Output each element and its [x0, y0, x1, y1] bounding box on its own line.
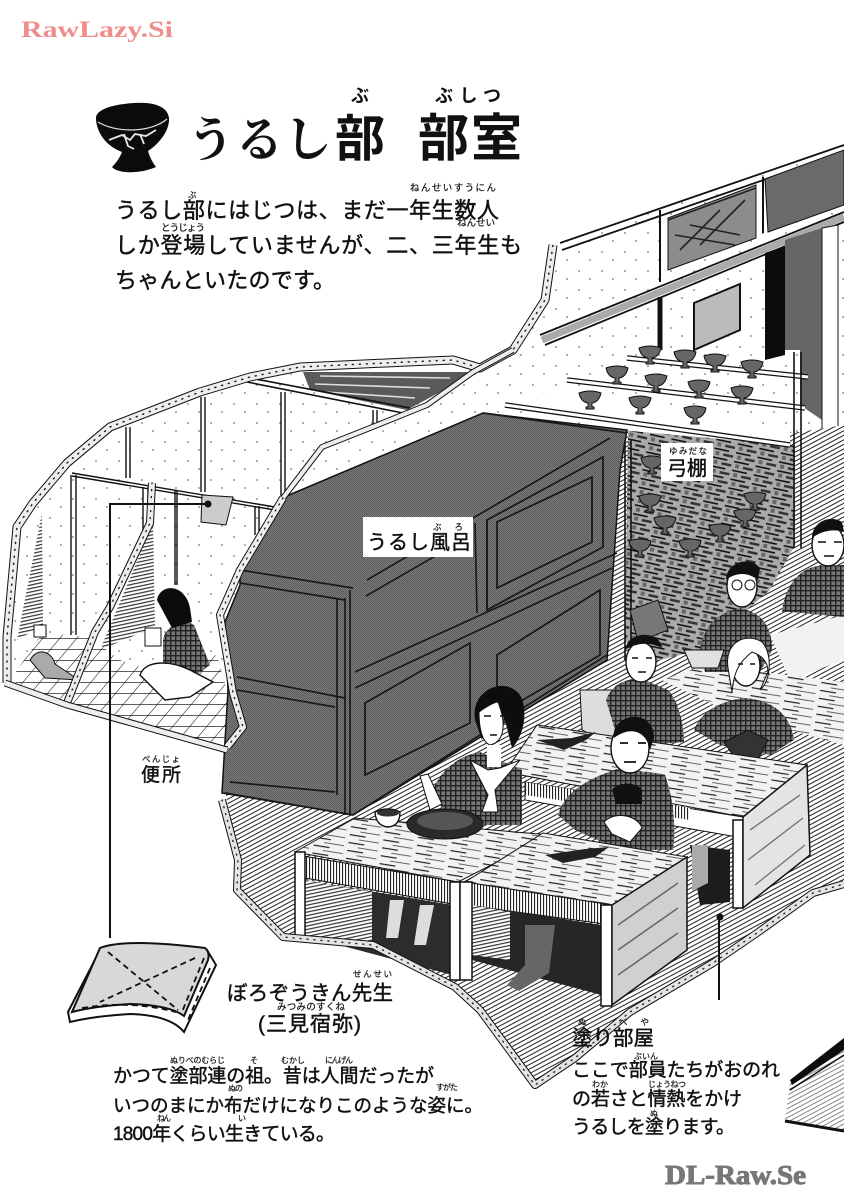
- leader line: toilet towel to rag: [110, 500, 212, 938]
- description: boro-zoukin sensei: ぬりべのむらじ: [170, 1056, 225, 1065]
- front girl student: [420, 686, 524, 825]
- intro text block: ねんせい: [457, 218, 495, 229]
- table B: [460, 833, 687, 1006]
- title: ぶしつ: [435, 86, 501, 106]
- description: boro-zoukin sensei: にんげん: [325, 1056, 353, 1065]
- label: yumidana: [661, 443, 713, 481]
- label: toilet: 便所: [141, 764, 181, 786]
- description: boro-zoukin sensei: ぬの: [228, 1084, 243, 1093]
- caption: lacquering room: ぬ: [578, 1017, 587, 1027]
- icon: rag teacher: [68, 943, 216, 1032]
- title: 部: [335, 111, 385, 167]
- lacquer furo cabinet: [222, 413, 627, 815]
- icon: lacquer bowl: [96, 103, 169, 172]
- description: boro-zoukin sensei: そ: [250, 1056, 258, 1065]
- title: 部室: [418, 110, 522, 167]
- back table with glasses student: [662, 561, 844, 745]
- caption: boro-zoukin sensei: (三見宿弥): [258, 1013, 361, 1036]
- description: boro-zoukin sensei: かつて塗部連の祖。昔は人間だったが: [113, 1065, 434, 1087]
- room fragment lower right: [785, 1038, 844, 1131]
- center boy student: [558, 717, 674, 850]
- title: うるし: [187, 114, 332, 167]
- leader line: lacquer room: [716, 914, 724, 1000]
- caption: boro-zoukin sensei: せんせい: [353, 969, 392, 979]
- intro text block: ねんせいすうにん: [410, 183, 496, 194]
- caption: lacquering room: 塗り部屋: [572, 1027, 654, 1050]
- caption: boro-zoukin sensei: ぼろぞうきん先生: [227, 982, 393, 1005]
- watermark: DL-Raw.Se: DL-Raw.Se: [665, 1160, 806, 1190]
- description: boro-zoukin sensei: いつのまにか布だけになりこのような姿に。: [113, 1095, 483, 1116]
- label: toilet: べんじょ: [142, 754, 180, 764]
- intro text block: [115, 183, 522, 293]
- back wall with transom: [540, 145, 844, 430]
- right student, far back: [770, 519, 844, 680]
- description: lacquering room: ここで部員たちがおのれ: [572, 1059, 780, 1081]
- girl in toilet room: [30, 588, 213, 700]
- caption: boro-zoukin sensei: [227, 969, 393, 1036]
- speckled cut edges: [5, 245, 844, 1085]
- label: urushi furo: うるし風呂: [367, 532, 471, 554]
- description: boro-zoukin sensei: ねん: [157, 1114, 171, 1123]
- title: ぶ: [351, 86, 369, 106]
- floor: [225, 425, 844, 1085]
- caption: lacquering room: [572, 1017, 654, 1050]
- bowl shelves (yumidana): [505, 346, 808, 665]
- title: [187, 86, 522, 167]
- description: boro-zoukin sensei: むかし: [281, 1056, 305, 1065]
- caption: boro-zoukin sensei: みつみのすくね: [277, 1002, 345, 1013]
- label: toilet: [141, 754, 181, 786]
- blond student: [694, 638, 794, 764]
- description: boro-zoukin sensei: 1800年くらい生きている。: [113, 1123, 335, 1145]
- back student boy: [580, 635, 684, 745]
- description: lacquering room: わか: [592, 1080, 608, 1089]
- description: boro-zoukin sensei: い: [238, 1114, 246, 1123]
- description: lacquering room: じょうねつ: [648, 1080, 686, 1089]
- toilet room walls: [7, 145, 844, 745]
- intro text block: ちゃんといたのです。: [115, 268, 335, 293]
- intro text block: ぶ: [188, 190, 197, 200]
- toilet room tile floor: [10, 633, 235, 748]
- caption: lacquering room: べや: [619, 1017, 649, 1027]
- description: lacquering room: ぶいん: [634, 1052, 658, 1061]
- description: boro-zoukin sensei: [113, 1056, 483, 1145]
- intro text block: とうじょう: [161, 223, 205, 234]
- ceiling fragment: [247, 372, 477, 413]
- description: lacquering room: の若さと情熱をかけ: [572, 1088, 742, 1110]
- description: boro-zoukin sensei: すがた: [436, 1082, 458, 1092]
- towel: [201, 495, 233, 525]
- label: yumidana: ゆみだな: [669, 446, 707, 456]
- intro text block: うるし部にはじつは、まだ一年生数人: [115, 198, 499, 223]
- watermark: RawLazy.Si: RawLazy.Si: [21, 17, 174, 42]
- description: lacquering room: うるしを塗ります。: [572, 1116, 735, 1138]
- label: yumidana: 弓棚: [667, 457, 707, 480]
- label: urushi furo: [363, 517, 473, 557]
- description: lacquering room: [572, 1052, 780, 1138]
- intro text block: しか登場していませんが、二、三年生も: [115, 233, 522, 258]
- bowl and plate on table: [375, 809, 483, 839]
- table C: [505, 725, 810, 908]
- label: urushi furo: ぶろ: [433, 522, 463, 532]
- description: lacquering room: ぬ: [650, 1109, 658, 1118]
- table A: [295, 818, 550, 980]
